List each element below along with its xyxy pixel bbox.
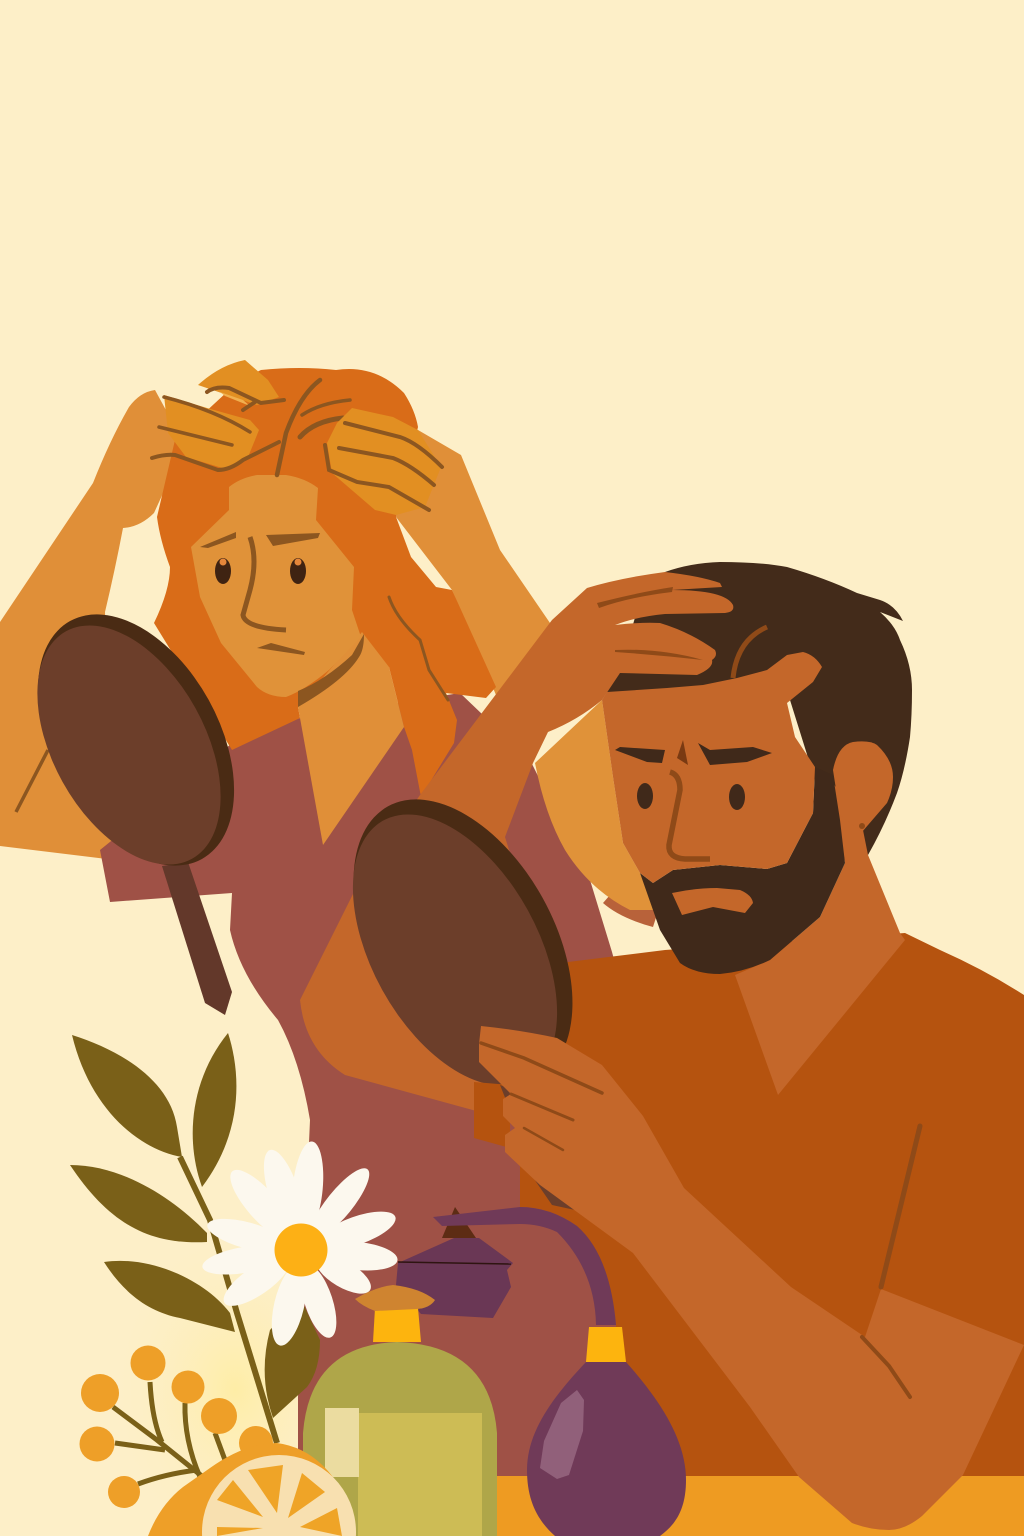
bulb highlight bbox=[540, 1390, 584, 1479]
berry sprig bbox=[80, 1346, 273, 1508]
man eyebrows bbox=[615, 743, 772, 765]
woman left arm bbox=[0, 390, 185, 860]
woman hair bbox=[154, 368, 496, 797]
man eyes bbox=[637, 783, 745, 810]
man raised arm and hand bbox=[300, 572, 733, 1112]
man mouth bbox=[672, 888, 753, 915]
purple perfume bottle with bulb bbox=[396, 1207, 686, 1536]
woman eyebrows bbox=[200, 532, 320, 548]
man holding hand and forearm bbox=[479, 1026, 1024, 1530]
daisy flower bbox=[200, 1140, 400, 1349]
man mirror bbox=[308, 762, 618, 1210]
woman mirror bbox=[0, 581, 275, 1015]
atomizer tube bbox=[433, 1207, 616, 1325]
woman shirt bbox=[100, 693, 625, 1476]
man neck bbox=[735, 783, 905, 1095]
pot shaped atomizer head bbox=[396, 1207, 513, 1318]
woman eyes bbox=[215, 558, 306, 584]
woman neck bbox=[298, 632, 404, 845]
woman right hand bbox=[325, 408, 442, 515]
lemon with slice bbox=[148, 1443, 356, 1536]
woman figure bbox=[0, 360, 625, 1476]
man hair parting line bbox=[733, 627, 767, 678]
man brow crease bbox=[677, 740, 688, 765]
woman neck shadow bbox=[298, 634, 364, 707]
man nose bbox=[669, 772, 710, 859]
woman nose bbox=[243, 537, 286, 630]
man hair bbox=[605, 562, 912, 860]
woman right arm bbox=[396, 430, 550, 695]
bottle cap bbox=[355, 1285, 435, 1311]
man figure bbox=[300, 562, 1024, 1536]
woman mouth bbox=[257, 643, 305, 655]
label highlight bbox=[325, 1408, 359, 1477]
woman hair strands bbox=[277, 380, 448, 700]
bottle label bbox=[358, 1413, 482, 1536]
man shirt bbox=[520, 933, 1024, 1480]
perfume bulb bbox=[527, 1362, 686, 1536]
leaves bbox=[70, 1033, 320, 1418]
table bbox=[300, 1476, 1024, 1536]
bulb collar bbox=[586, 1327, 626, 1362]
green oil bottle bbox=[303, 1285, 497, 1536]
light skin shape behind man's arm bbox=[535, 700, 660, 927]
man ear bbox=[833, 741, 893, 832]
man face bbox=[602, 652, 822, 915]
plant with leaves bbox=[70, 1033, 320, 1443]
plant stem bbox=[180, 1157, 277, 1443]
man beard bbox=[640, 767, 845, 974]
bottle body bbox=[303, 1342, 497, 1536]
woman left hand bbox=[152, 360, 284, 470]
bottle neck bbox=[373, 1308, 421, 1342]
woman face bbox=[191, 475, 364, 707]
